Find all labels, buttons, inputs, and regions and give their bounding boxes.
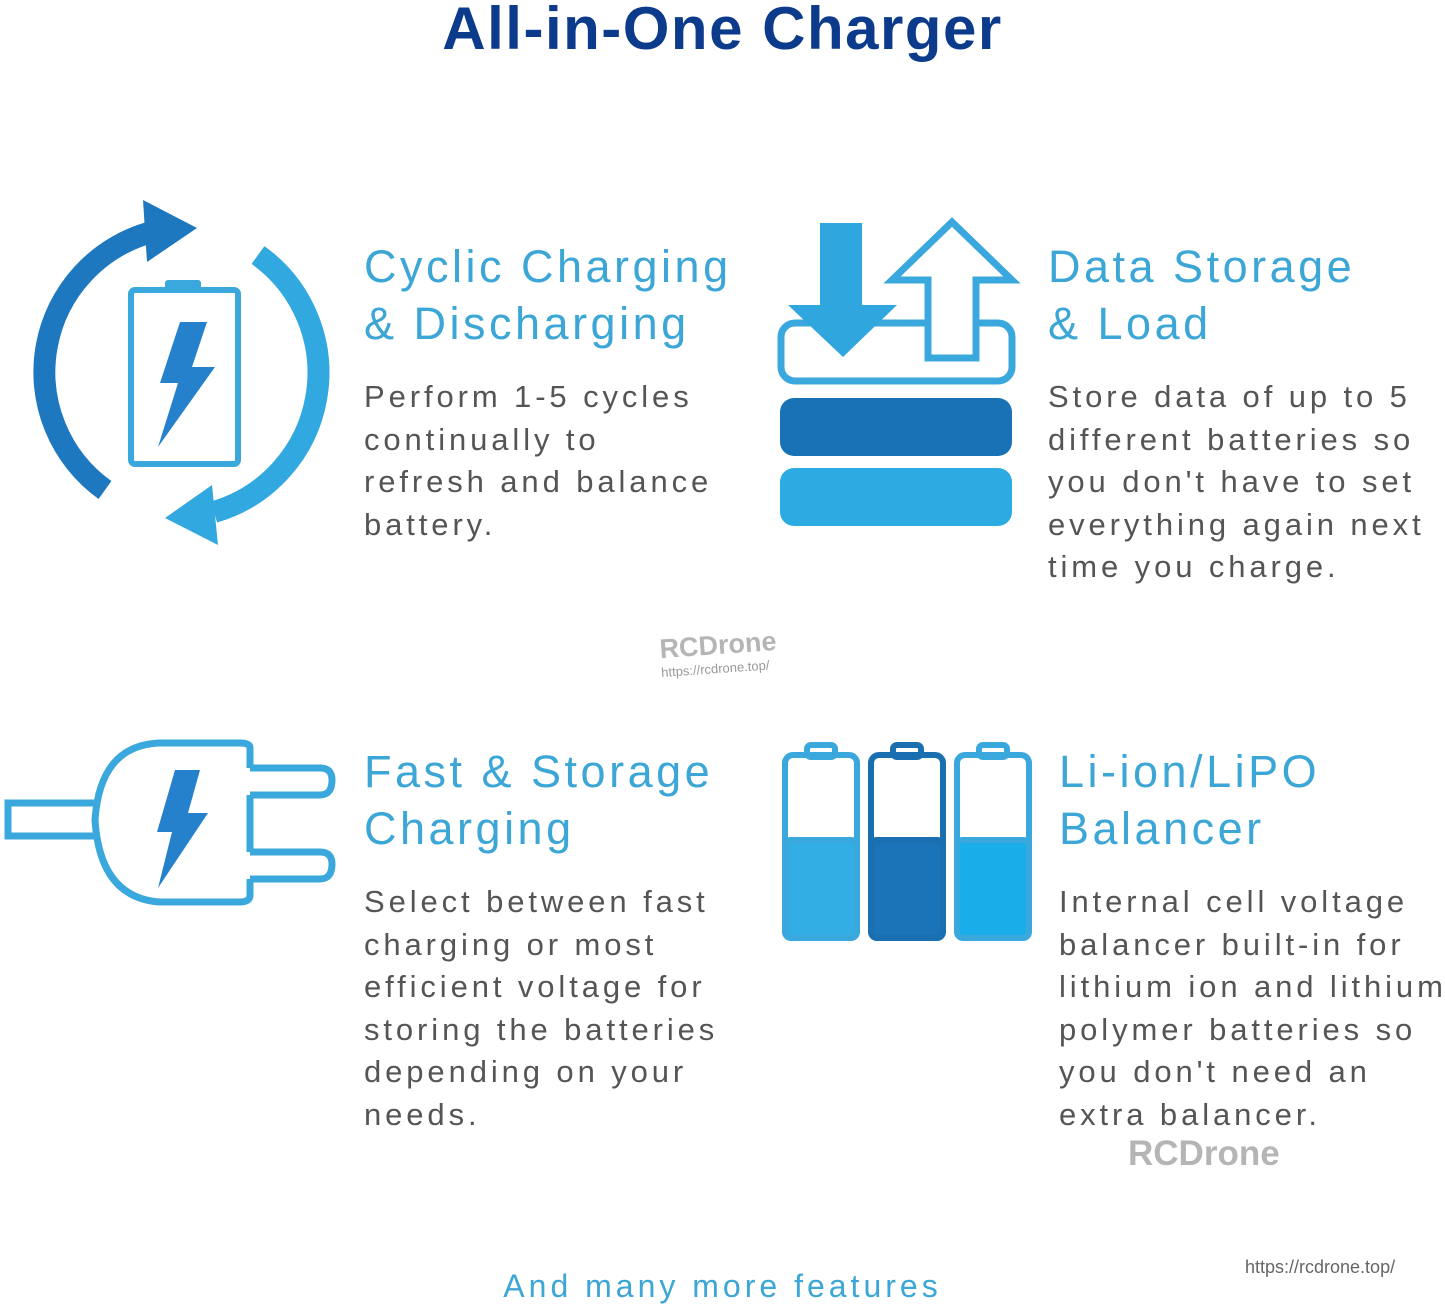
text: balancer: polymer batteries so [1059,1012,1416,1047]
text: cyclic: battery. [364,507,496,542]
watermark right: RCDrone [1128,1134,1280,1173]
text: balancer [1059,884,1445,1132]
heading: cyclic: Cyclic Charging [364,241,732,292]
text: balancer: extra balancer. [1059,1097,1321,1132]
heading: data storage: Data Storage [1048,241,1355,292]
watermark center: RCDrone [659,626,777,664]
heading: data storage: & Load [1048,298,1212,349]
icon: cyclic charging [33,200,330,545]
text: data storage: Store data of up to 5 [1048,379,1411,414]
text: data storage: different batteries so [1048,422,1414,457]
text: balancer: balancer built-in for [1059,927,1405,962]
text: data storage [1048,379,1425,584]
text: data storage: everything again next [1048,507,1425,542]
text: fast storage: storing the batteries [364,1012,718,1047]
text: fast storage: depending on your [364,1054,687,1089]
text: fast storage [364,884,718,1132]
text: fast storage: needs. [364,1097,480,1132]
text: balancer: Internal cell voltage [1059,884,1408,919]
icon: plug [4,740,336,906]
heading: cyclic: & Discharging [364,298,690,349]
text: cyclic [364,379,712,542]
heading: fast storage: Charging [364,803,575,854]
heading: balancer [1059,746,1320,854]
text: cyclic: refresh and balance [364,464,712,499]
text: cyclic: Perform 1-5 cycles [364,379,693,414]
heading: balancer: Balancer [1059,803,1265,854]
text: data storage: you don't have to set [1048,464,1415,499]
heading: fast storage: Fast & Storage [364,746,713,797]
footer text: And many more features [503,1268,942,1304]
text: fast storage: efficient voltage for [364,969,706,1004]
text: balancer: lithium ion and lithium [1059,969,1445,1004]
text: cyclic: continually to [364,422,600,457]
text: fast storage: charging or most [364,927,657,962]
heading: balancer: Li-ion/LiPO [1059,746,1320,797]
text: fast storage: Select between fast [364,884,709,919]
heading: fast storage [364,746,713,854]
watermark center: https://rcdrone.top/ [661,657,770,680]
heading: data storage [1048,241,1355,349]
icon: batteries [782,742,1032,941]
icon: data storage [778,217,1020,526]
heading: cyclic [364,241,732,349]
text: data storage: time you charge. [1048,549,1340,584]
url: https://rcdrone.top/ [1245,1257,1395,1277]
text: balancer: you don't need an [1059,1054,1371,1089]
